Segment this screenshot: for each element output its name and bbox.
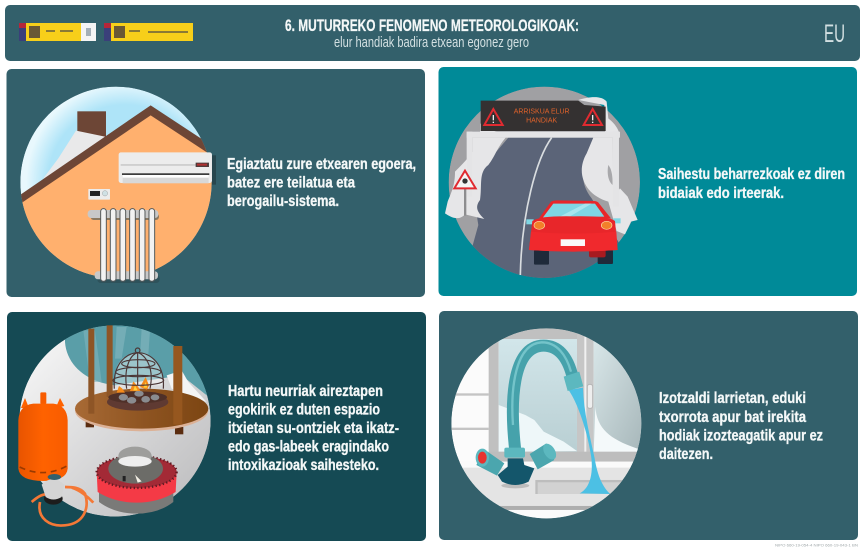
thermostat (88, 189, 110, 200)
logo: ministry 2 (104, 23, 193, 41)
regulator (42, 474, 64, 505)
text (227, 156, 416, 210)
panel: check your home (0, 69, 425, 300)
text: edo gas-labeek eragindako (228, 438, 389, 456)
illustration: house wall with air conditioner and radiator (20, 86, 216, 283)
footer reference code: NIPO 660-19-054-4 NIPO 660-19-043-1 BN (775, 542, 858, 548)
air conditioner (119, 152, 216, 185)
subtitle: elur handiak badira etxean egonez gero (334, 35, 529, 51)
water stream (569, 388, 610, 494)
message board (481, 101, 606, 131)
gantry (467, 132, 620, 207)
text (659, 390, 823, 463)
table (75, 325, 208, 434)
text: itxietan su-ontziek eta ikatz- (228, 420, 399, 437)
header bar (5, 5, 860, 61)
text: Hartu neurriak aireztapen (228, 383, 383, 400)
text: berogailu-sistema. (227, 193, 339, 210)
message board: ARRISKUA ELUR (514, 109, 570, 116)
road sign (454, 171, 476, 216)
text (658, 166, 845, 202)
text: Izotzaldi larrietan, eduki (659, 390, 806, 407)
panel: keep the tap slightly open (439, 311, 858, 540)
illustration: brazier table, gas bottle and gas heater (18, 322, 215, 526)
illustration: snowy road with warning sign and red car (445, 87, 645, 285)
logo: ministry 1 (19, 23, 96, 41)
language code: EU (824, 20, 845, 48)
text: hodiak izozteagatik apur ez (659, 428, 823, 444)
text: batez ere teilatua eta (227, 174, 355, 192)
road centre line (520, 138, 552, 275)
brazier (107, 348, 168, 411)
hose (32, 487, 93, 526)
red car (526, 200, 621, 265)
text: daitezen. (659, 446, 713, 463)
faucet (476, 342, 583, 488)
text (228, 383, 399, 474)
illustration: running tap by a frosted window (451, 328, 642, 518)
text: intoxikazioak saihesteko. (228, 457, 379, 474)
message board: HANDIAK (526, 118, 558, 125)
gas heater (97, 447, 177, 514)
radiator (88, 209, 160, 283)
window handle (587, 384, 593, 408)
text: txorrota apur bat irekita (659, 409, 806, 426)
panel: ventilation and intoxication (7, 312, 426, 541)
text: bidaiak edo irteerak. (658, 185, 784, 202)
title: 6. MUTURREKO FENOMENO METEOROLOGIKOAK: (285, 16, 579, 35)
text: Egiaztatu zure etxearen egoera, (227, 156, 416, 173)
gas bottle (18, 392, 68, 481)
panel: avoid travel (438, 67, 857, 296)
text: egokirik ez duten espazio (228, 402, 380, 418)
